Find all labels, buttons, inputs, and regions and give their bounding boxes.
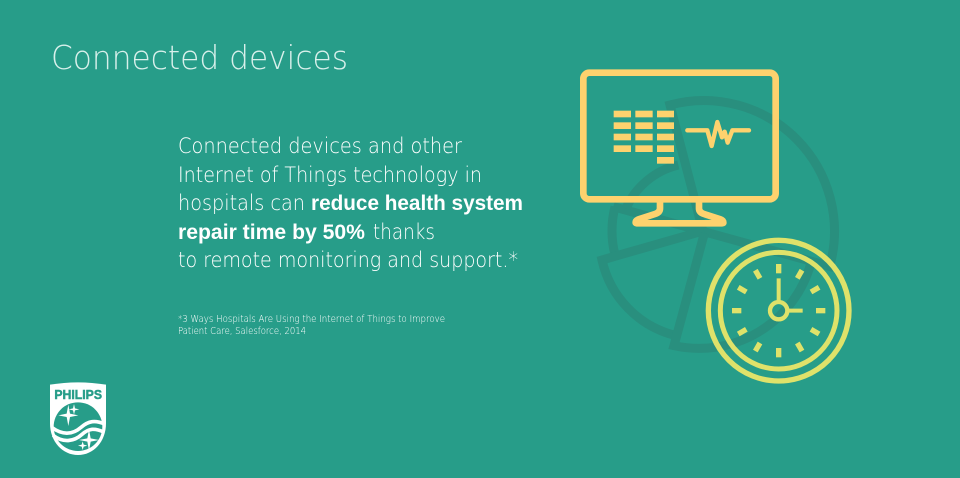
icon: computer monitor <box>583 73 776 223</box>
logo: Philips shield <box>50 382 106 455</box>
body text block: reduce health system <box>311 192 523 215</box>
data bars <box>614 111 674 164</box>
icon: pie chart background <box>602 101 834 348</box>
body text block: thanks <box>373 220 435 244</box>
body text block: repair time by 50% <box>178 221 365 244</box>
footnote: Patient Care, Salesforce, 2014 <box>178 326 306 337</box>
heartbeat line <box>687 122 749 146</box>
footnote <box>178 314 445 337</box>
body text block: to remote monitoring and support.* <box>178 248 518 272</box>
title: Connected devices <box>51 38 348 77</box>
body text block: hospitals can <box>178 191 305 215</box>
icon: clock <box>708 240 849 381</box>
clock ticks <box>732 264 825 357</box>
monitor frame <box>583 73 776 199</box>
body text block: Connected devices and other <box>178 134 462 158</box>
body text block <box>178 134 523 272</box>
footnote: *3 Ways Hospitals Are Using the Internet of Things to Improve <box>178 314 445 325</box>
logo: Philips shield: PHILIPS <box>54 388 102 402</box>
body text block: Internet of Things technology in <box>178 163 482 187</box>
monitor stand <box>636 203 723 223</box>
